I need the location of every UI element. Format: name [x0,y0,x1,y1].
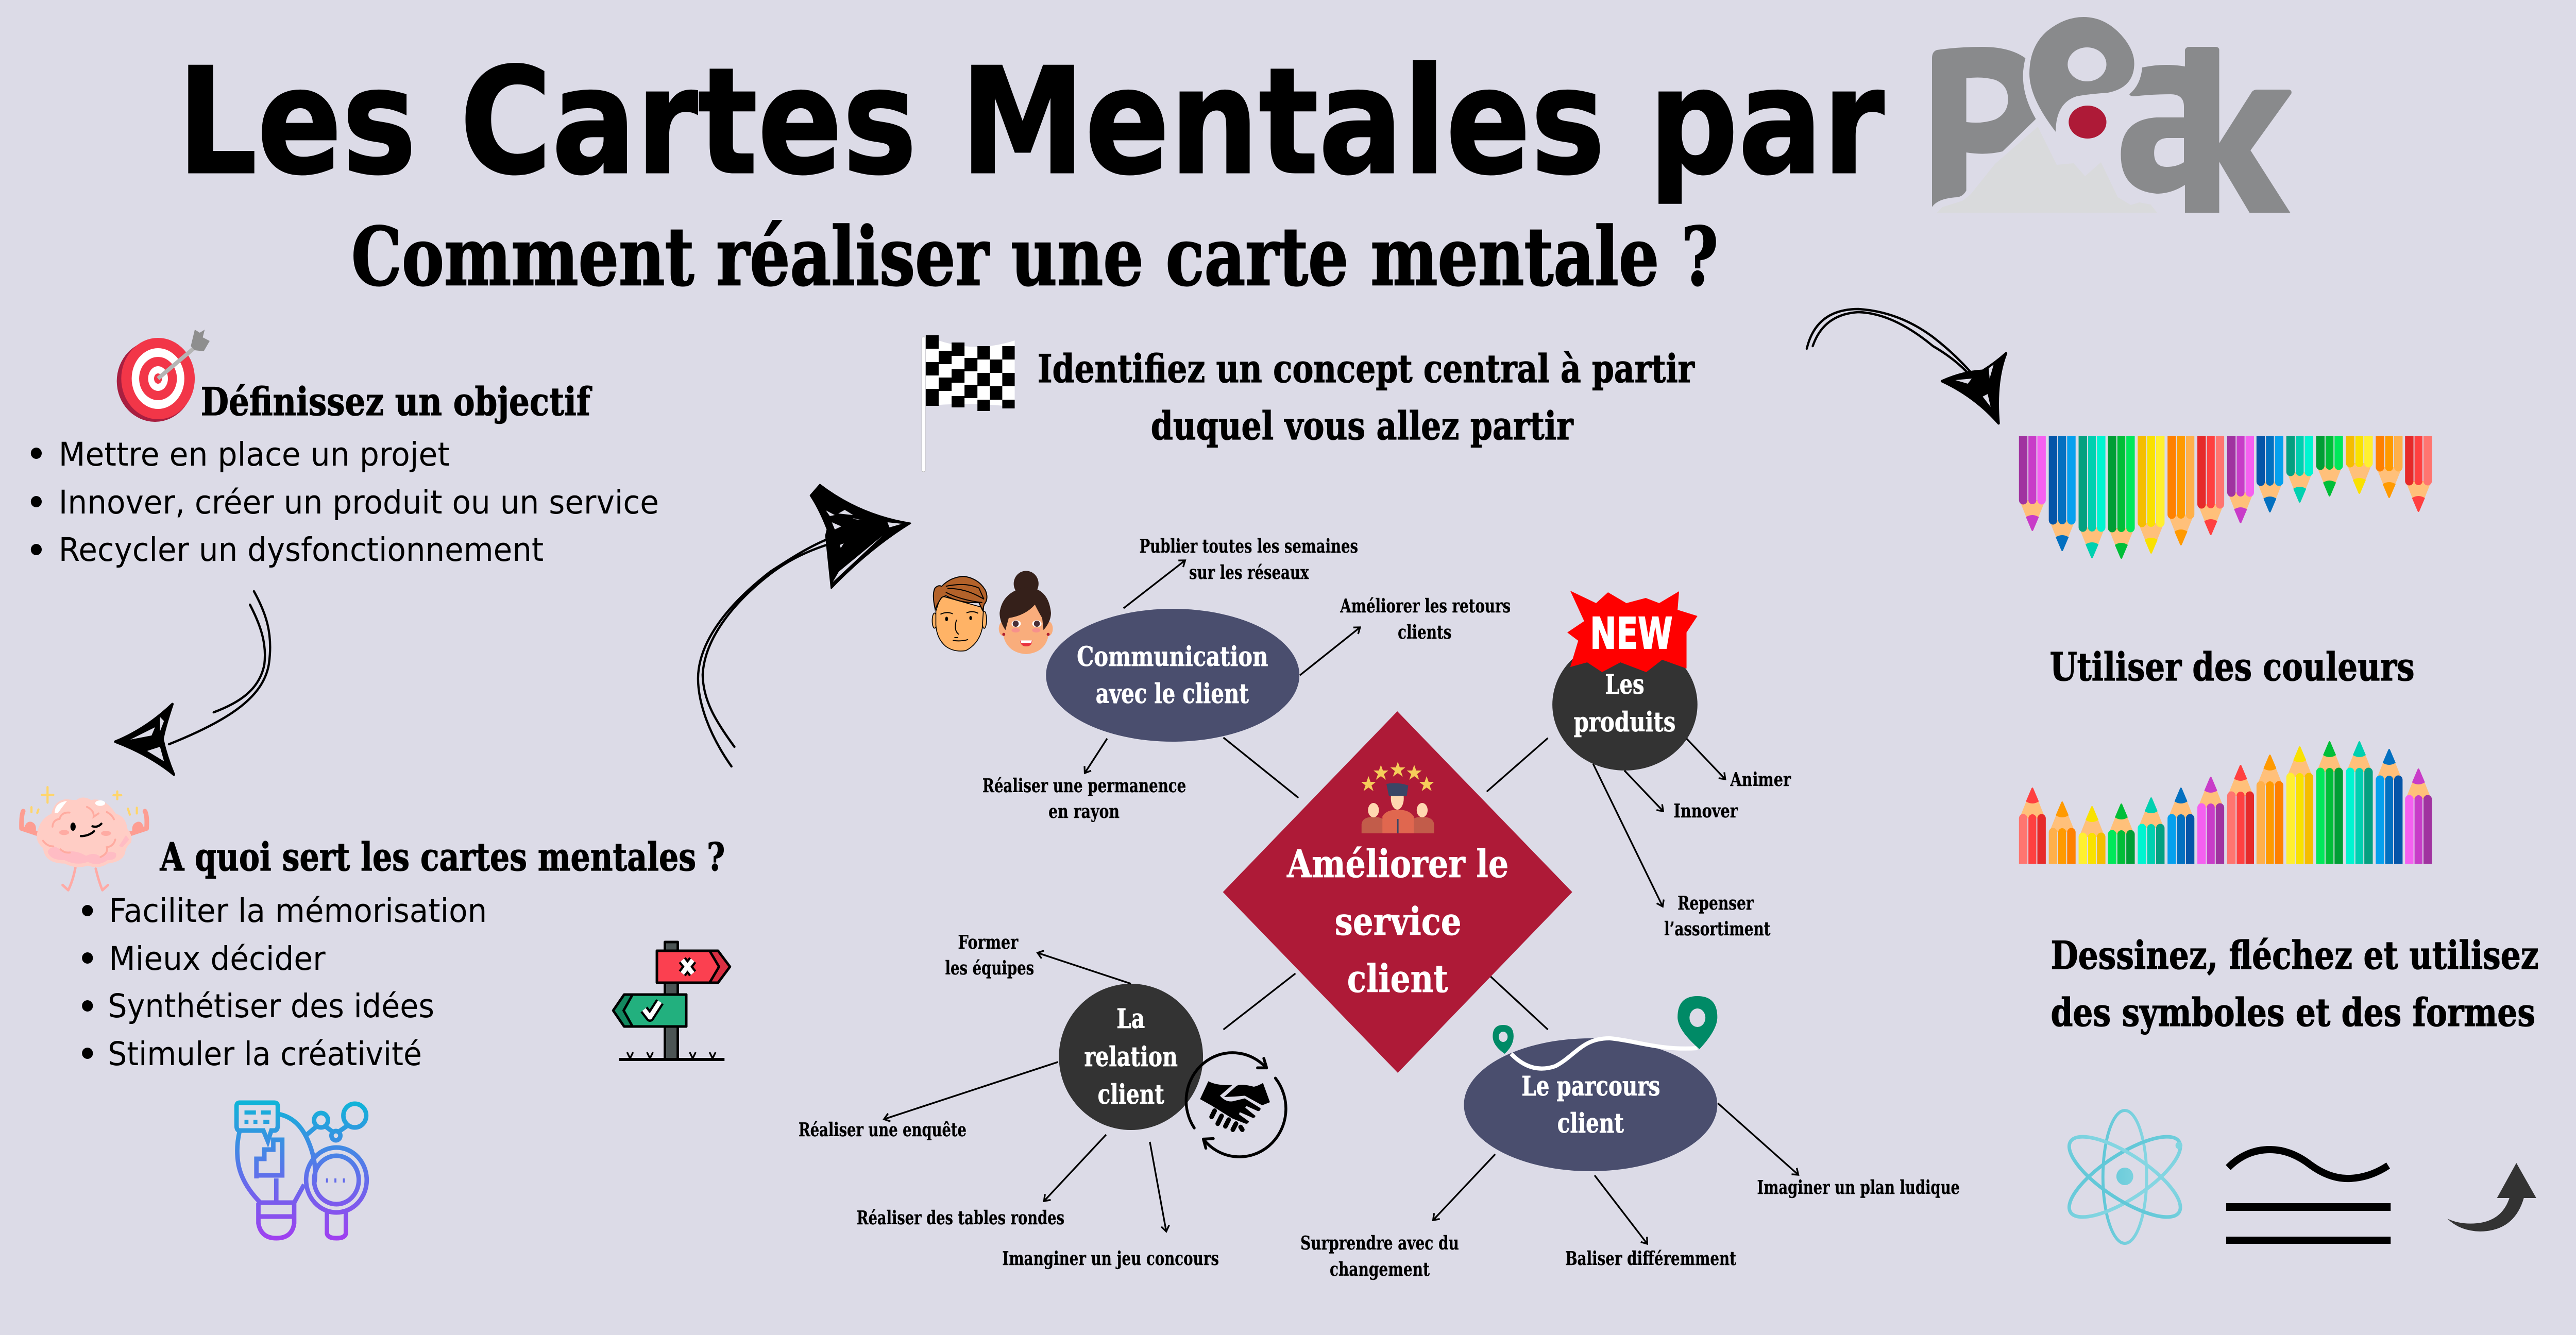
leaf: innover [1624,771,1738,822]
heading: couleurs: Utiliser des couleurs [2050,645,2415,690]
icon: target [117,330,210,422]
leaf: enquete: Réaliser une enquête [799,1119,967,1141]
leaf: surprendre [1300,1154,1495,1280]
leaf: plan ludique: Imaginer un plan ludique [1757,1177,1960,1199]
icon: lightbulb analysis [236,1103,367,1238]
heading: concept central: Identifiez un concept central à partir [1038,347,1695,391]
leaf: permanence [982,739,1186,823]
list: a quoi sert [82,892,487,1073]
badge: new: NEW [1590,609,1673,659]
arrow: vers concept central [698,485,910,766]
leaf: surprendre: changement [1330,1259,1430,1280]
list: a quoi sert: Faciliter la mémorisation [109,892,487,930]
leaf: former: les équipes [945,957,1034,979]
node label: les produits [1574,669,1675,738]
leaf: animer [1687,739,1791,791]
leaf: jeu concours [1002,1142,1219,1270]
node label: communication: avec le client [1096,678,1249,710]
heading: concept central: duquel vous allez partir [1151,404,1574,449]
list: objectif: Recycler un dysfonctionnement [59,531,544,569]
node label: les produits: Les [1605,669,1645,700]
leaf: jeu concours: Imanginer un jeu concours [1002,1248,1219,1270]
icon: route with pins [1493,996,1717,1069]
node label: la relation client: relation [1084,1041,1178,1073]
leaf: publier [1124,536,1358,608]
heading: a quoi sert: A quoi sert les cartes mentales ? [160,835,725,880]
leaf: tables rondes [857,1135,1106,1229]
leaf: permanence: en rayon [1048,801,1120,823]
branch node: les produits [1552,639,1698,771]
icon: bottom coloured pencils [2019,741,2432,864]
icon: brain [22,787,147,890]
list: objectif: Innover, créer un produit ou un service [59,484,659,521]
leaf: plan ludique [1718,1103,1960,1199]
central concept label: Améliorer le [1286,842,1509,886]
node label: la relation client: La [1116,1003,1145,1035]
central concept label: client [1347,957,1448,1001]
badge: new [1567,591,1698,672]
icon: curved arrow [2447,1163,2536,1231]
leaf: former [945,932,1131,984]
heading: dessinez [2051,933,2539,1035]
connectors to central concept [1224,738,1548,1030]
node label: le parcours client: client [1557,1108,1624,1139]
subtitle: Comment réaliser une carte mentale ? [351,210,1718,304]
heading: objectif: Définissez un objectif [201,380,592,424]
logo: Peak [1932,17,2292,213]
node label: la relation client [1084,1003,1178,1110]
central concept label [1286,842,1509,1001]
central concept diamond [1223,711,1572,1073]
list: objectif: Mettre en place un projet [59,436,450,473]
leaf: retours clients: clients [1398,622,1451,643]
list: a quoi sert: Mieux décider [109,940,326,978]
list: a quoi sert: Synthétiser des idées [108,987,434,1025]
icon: top coloured pencils [2019,436,2432,559]
leaf: tables rondes: Réaliser des tables rondes [857,1207,1064,1229]
title: Les Cartes Mentales par [177,37,1885,208]
leaf: permanence: Réaliser une permanence [982,775,1186,797]
branch node: la relation client [1059,984,1203,1130]
list: objectif [31,436,659,569]
leaf: surprendre: Surprendre avec du [1300,1233,1459,1254]
node label: communication [1077,641,1268,710]
list: a quoi sert: Stimuler la créativité [108,1035,422,1073]
icon: atom [2059,1110,2191,1243]
icon: handshake [1186,1053,1286,1157]
central concept label: service [1335,900,1462,944]
heading: concept central [1038,347,1695,449]
arrow: vers couleurs [1807,309,2006,423]
leaf: enquete [799,1062,1058,1141]
icon: signpost [613,942,730,1059]
leaf: innover: Innover [1673,800,1738,822]
leaf: repenser: l’assortiment [1664,918,1771,940]
node label: les produits: produits [1574,707,1675,738]
icon: customer rating [1361,762,1434,833]
leaf: repenser: Repenser [1677,893,1754,914]
leaf: former: Former [958,932,1019,953]
icon: client faces [932,571,1053,654]
leaf: animer: Animer [1730,769,1791,791]
icon: checkered flag [922,335,1015,472]
leaf: repenser [1593,764,1771,940]
branch node: communication [1046,609,1299,742]
leaf: baliser: Baliser différemment [1565,1248,1736,1270]
node label: le parcours client: Le parcours [1521,1071,1660,1102]
branch node: le parcours client [1464,1038,1717,1171]
arrow: objectif to cartes [115,591,270,775]
leaf: retours clients [1300,595,1511,675]
node label: communication: Communication [1077,641,1268,673]
leaf: baliser [1565,1175,1736,1270]
leaf: retours clients: Améliorer les retours [1340,595,1511,617]
node label: la relation client: client [1098,1079,1164,1110]
leaf: publier: sur les réseaux [1189,562,1309,584]
node label: le parcours client [1521,1071,1660,1139]
icon: wave and bars [2226,1150,2391,1244]
leaf: publier: Publier toutes les semaines [1140,536,1358,557]
